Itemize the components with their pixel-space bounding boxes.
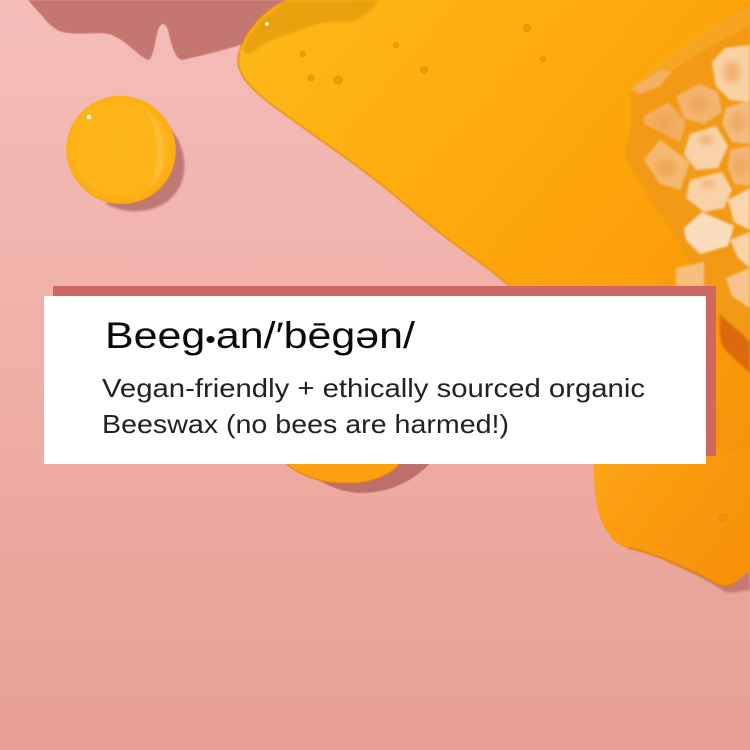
honey spill: upper [238,0,750,455]
honeycomb cell centres [655,61,747,188]
bubble on lower pool [720,514,726,522]
center drip with shadow [285,462,431,493]
honey drop with shadow [48,78,194,222]
honeycomb cells [632,45,750,308]
bubbles [300,24,546,84]
definition text [102,373,645,439]
definition text: Vegan-friendly + ethically sourced organic [102,373,645,403]
honey rim [238,0,512,288]
honeycomb [624,2,750,345]
definition text: Beeswax (no bees are harmed!) [102,409,509,439]
pool shadow [630,552,750,593]
honey top shadow reflection [243,0,378,54]
card: red backing [53,286,716,456]
honey pool: lower right [593,450,750,593]
card: white panel [44,296,706,464]
top shadow [28,0,285,60]
heading: Beeg •an/′bēgən/ [105,315,416,356]
pool rim [628,548,735,586]
dark honey beside card [719,313,750,373]
